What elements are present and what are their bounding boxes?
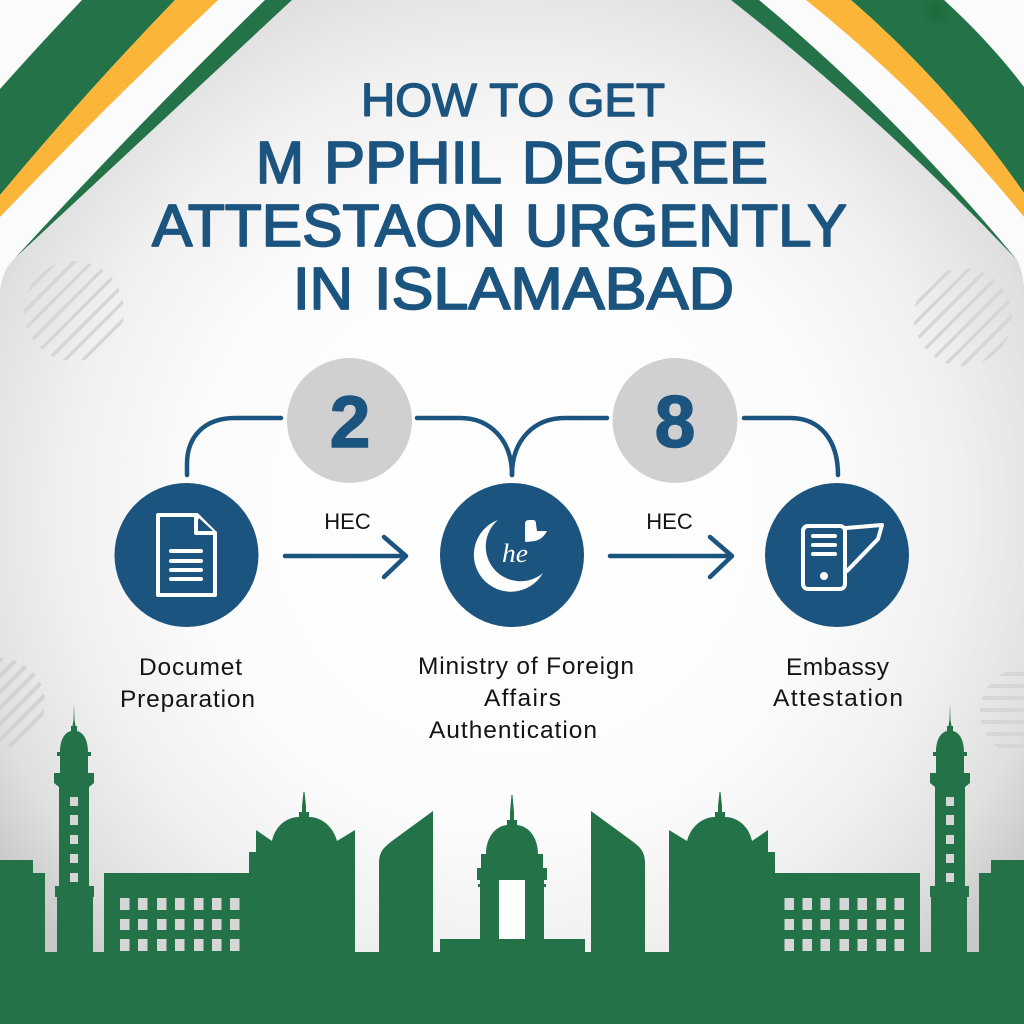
step 2 label: Affairs bbox=[484, 685, 561, 712]
step 1 icon: document bbox=[114, 483, 258, 627]
title line 2: PPHIL: PPHIL bbox=[324, 130, 502, 196]
number badge 8: 8 bbox=[655, 382, 695, 463]
skyline right half bbox=[591, 703, 1024, 953]
step 2 label bbox=[418, 653, 634, 744]
arrow 2 with HEC label bbox=[610, 509, 732, 577]
step 3 label: Attestation bbox=[773, 685, 903, 712]
skyline left half bbox=[0, 703, 433, 953]
decorative striped circle: lower left bbox=[0, 658, 44, 748]
title bbox=[152, 74, 847, 322]
flag ribbon: top right corner bbox=[731, 0, 1024, 285]
step 2 icon: crescent with he bbox=[440, 483, 584, 627]
title line 3: ATTESTAON: ATTESTAON bbox=[152, 193, 506, 259]
number badge 2 bbox=[287, 358, 412, 483]
step 1 label: Documet bbox=[139, 654, 242, 681]
step 3 icon: embassy attestation device bbox=[765, 483, 909, 627]
step 2 icon: crescent with he: he bbox=[502, 539, 528, 568]
decorative striped circle: lower right bbox=[980, 672, 1024, 748]
arrow 1 with HEC label bbox=[285, 509, 406, 577]
arrow 2 with HEC label: HEC bbox=[646, 509, 693, 534]
decorative striped circle: top left bbox=[24, 261, 124, 360]
title line 4: IN: IN bbox=[293, 256, 353, 322]
title line 2: DEGREE: DEGREE bbox=[522, 130, 768, 196]
step 2 label: Ministry of Foreign bbox=[418, 653, 634, 680]
connector lines between steps bbox=[187, 418, 838, 475]
title line 1: HOW TO GET bbox=[361, 74, 665, 126]
flag ribbon: top left corner bbox=[0, 0, 292, 290]
step 3 label bbox=[773, 654, 903, 712]
skyline centre gate bbox=[440, 795, 585, 953]
step 3 label: Embassy bbox=[786, 654, 890, 681]
title line 4: ISLAMABAD: ISLAMABAD bbox=[374, 256, 734, 322]
step 1 label bbox=[120, 654, 255, 713]
green city skyline bbox=[0, 703, 1024, 1024]
decorative striped circle: top right bbox=[914, 268, 1012, 366]
step 1 label: Preparation bbox=[120, 686, 255, 713]
number badge 2: 2 bbox=[330, 382, 370, 463]
step 2 label: Authentication bbox=[429, 717, 597, 744]
title line 2: M: M bbox=[256, 130, 304, 196]
title line 3: URGENTLY: URGENTLY bbox=[525, 193, 847, 259]
number badge 8 bbox=[612, 358, 738, 483]
arrow 1 with HEC label: HEC bbox=[324, 509, 371, 534]
